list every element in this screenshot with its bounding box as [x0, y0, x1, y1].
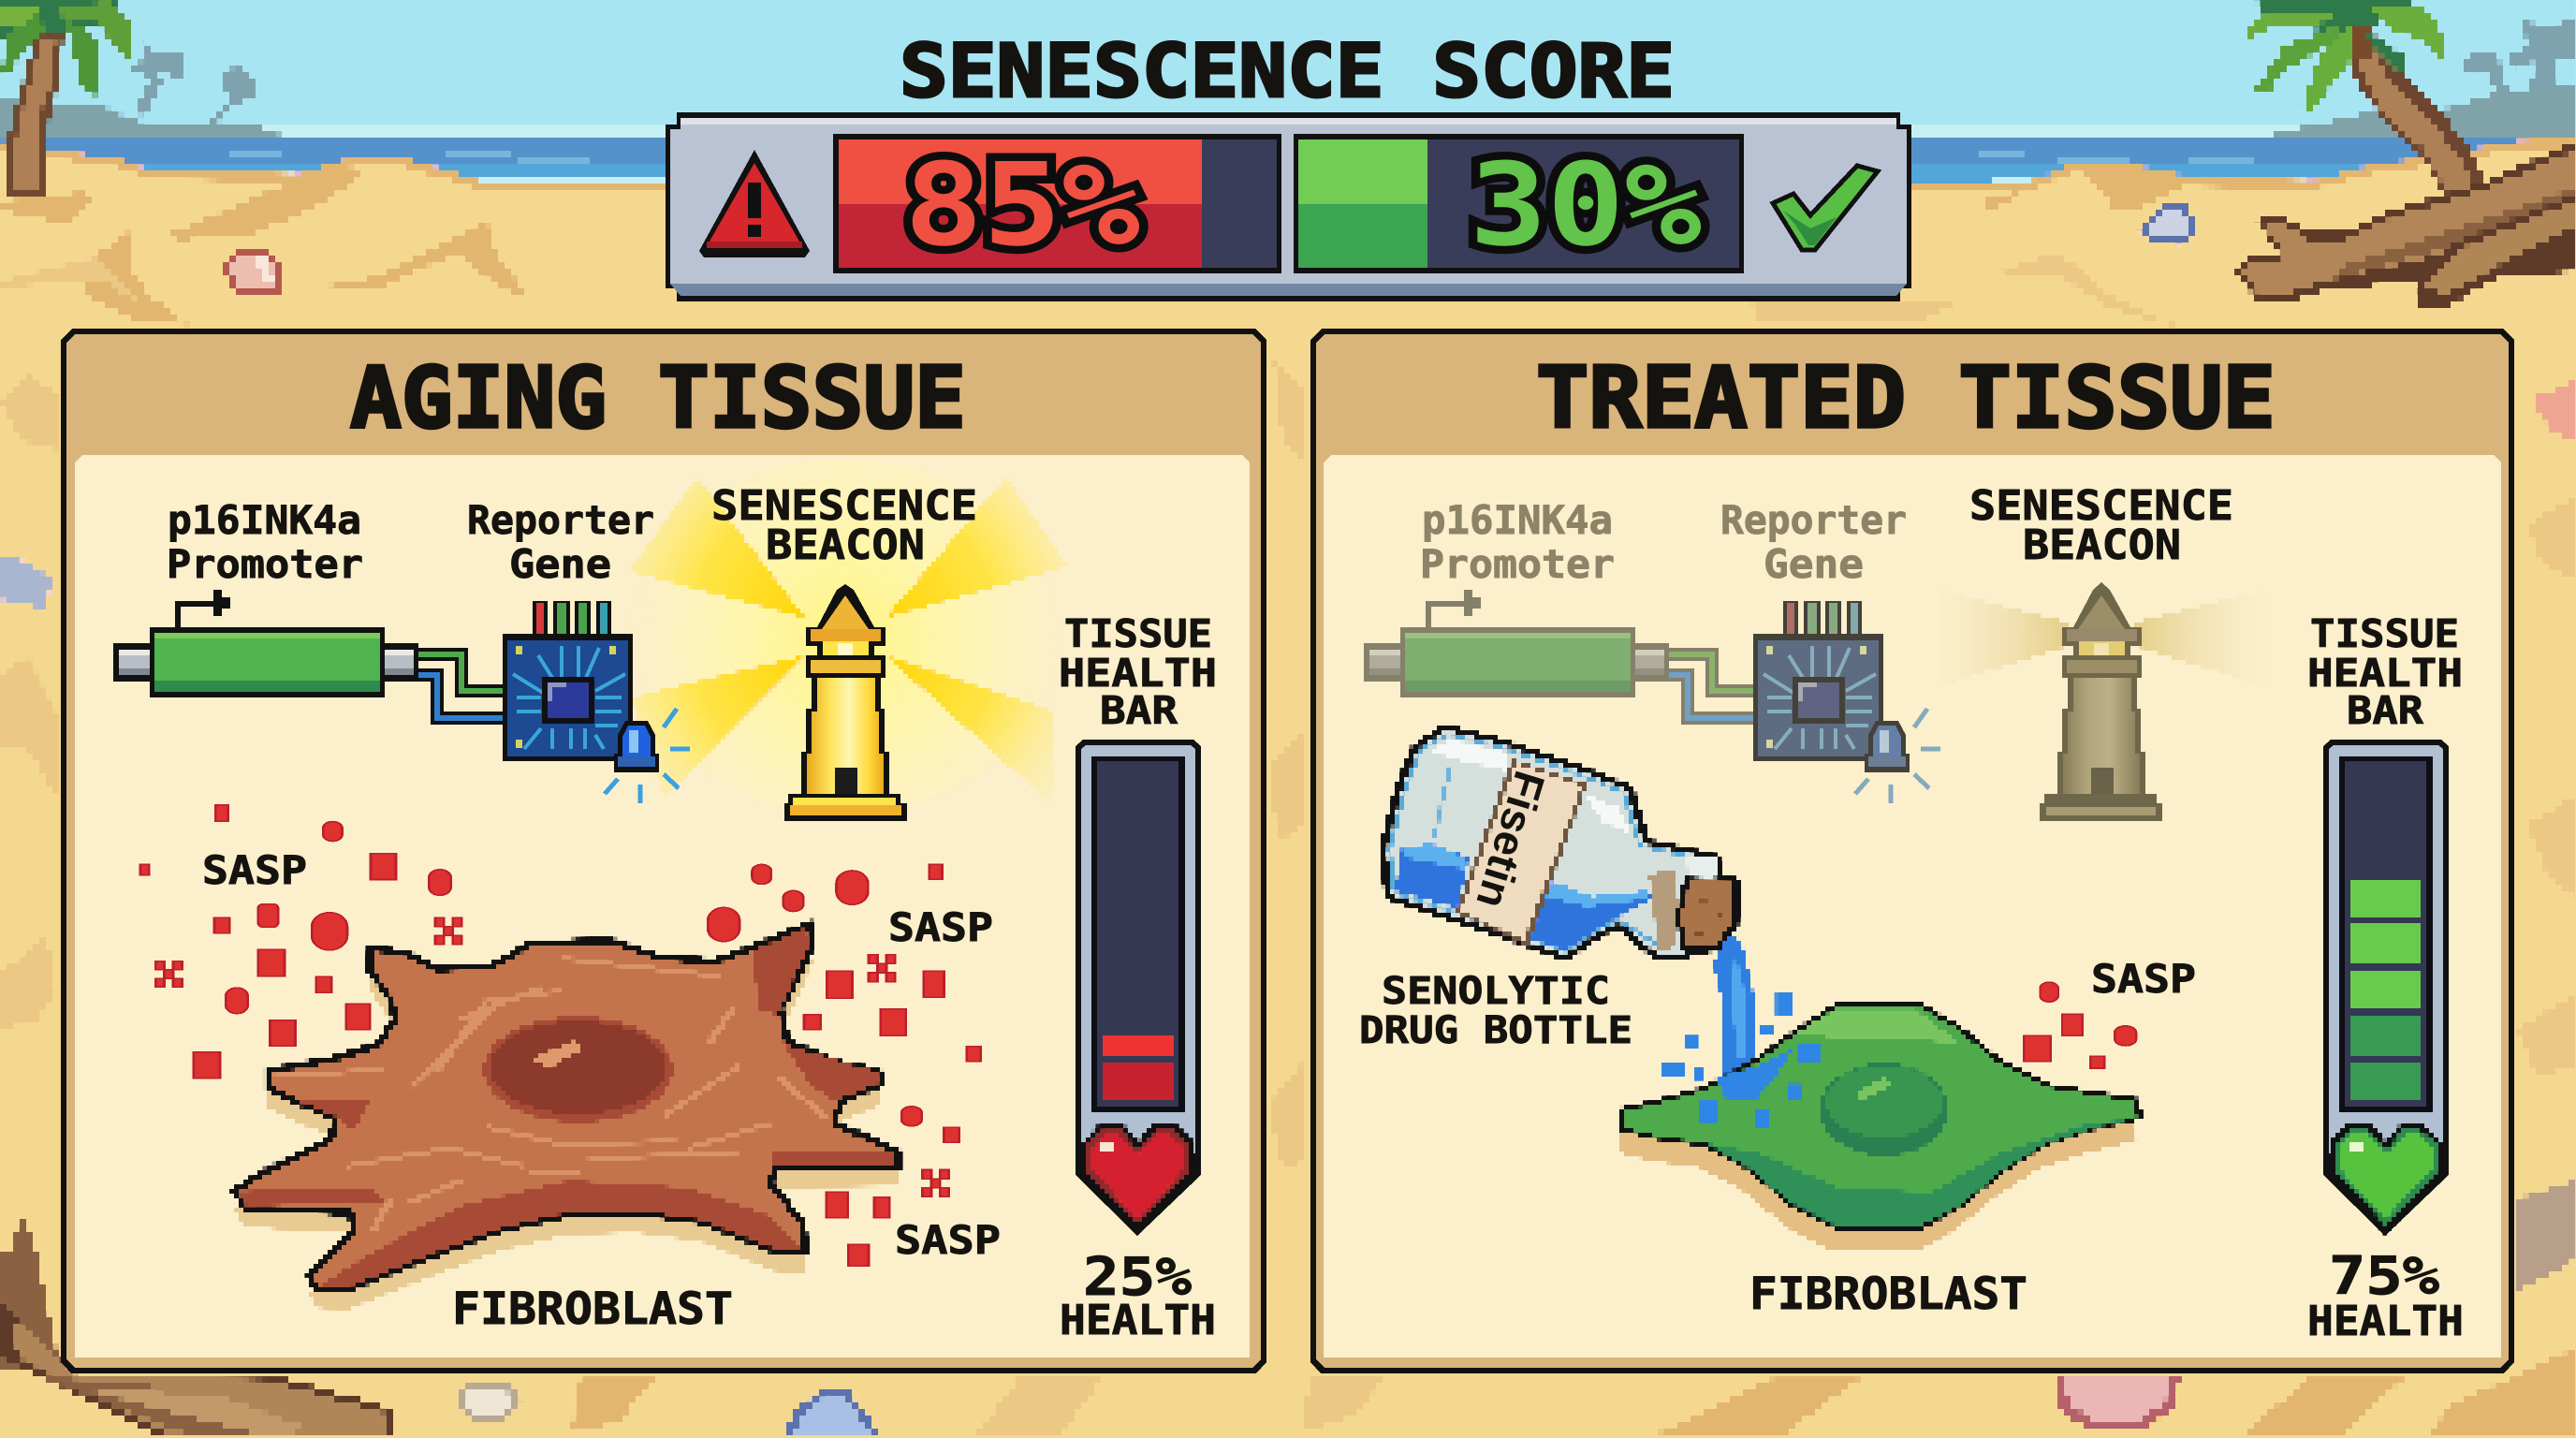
label: senolytic drug bottle: DRUG BOTTLE: [1359, 1009, 1632, 1052]
lighthouse beacon (dimmed): [2040, 582, 2162, 821]
reporter chip (dimmed): [1753, 601, 1940, 803]
drug splash on cell: [1699, 1045, 1819, 1126]
label: SASP 3: SASP: [895, 1217, 1001, 1263]
label: SASP 1: SASP: [202, 847, 307, 893]
panel: aging tissue: [61, 329, 1266, 1373]
warning icon: [699, 150, 810, 257]
SASP particles: [140, 805, 981, 1266]
label: SASP: SASP: [2091, 956, 2196, 1002]
title: senescence score: SENESCENCE SCORE: [900, 30, 1675, 114]
stream of drug: [1713, 932, 1767, 1102]
blue shell bottom: [781, 1388, 884, 1438]
driftwood bottom left: [0, 1214, 394, 1438]
health bar title: HEALTH: [1059, 651, 1217, 696]
label: reporter gene (dimmed): Reporter: [1720, 497, 1907, 543]
red fill segments: [1103, 1035, 1174, 1100]
label: p16INK4a promoter: Promoter: [167, 541, 363, 587]
check icon: [1773, 166, 1878, 250]
green heart: [2329, 1123, 2443, 1234]
pink shell bottom: [2054, 1373, 2181, 1430]
health bar title: HEALTH: [2307, 651, 2463, 696]
tissue health bar: 75%: [2307, 611, 2464, 1345]
health bar title: BAR: [2347, 688, 2423, 733]
heading: TREATED TISSUE: [1536, 349, 2276, 448]
label: senescence beacon: BEACON: [766, 521, 925, 569]
green fill segments: [2350, 880, 2421, 1100]
label: p16INK4a promoter (dimmed): p16INK4a: [1422, 497, 1613, 543]
shell top left: [226, 246, 284, 295]
foreground left palm: [0, 0, 133, 198]
reporter chip with LED: [503, 601, 690, 803]
shell left edge: [0, 555, 52, 609]
health percent: 25%: [1083, 1247, 1192, 1308]
label: fibroblast: FIBROBLAST: [1749, 1269, 2027, 1320]
label: reporter gene (dimmed): Gene: [1764, 541, 1864, 587]
bottle label text: Fisetin: [1467, 766, 1555, 914]
health label: HEALTH: [1060, 1297, 1216, 1344]
promoter cylinder with wires: [113, 590, 503, 718]
red heart: [1081, 1123, 1195, 1234]
lighthouse beacon: [784, 584, 907, 821]
label: p16INK4a promoter: p16INK4a: [168, 497, 361, 543]
splash droplets: [1663, 993, 1819, 1126]
score panel: [666, 112, 1911, 301]
label: senolytic drug bottle: SENOLYTIC: [1382, 970, 1610, 1013]
senolytic drug bottle: [1383, 727, 1819, 1126]
distant palms are drawn in the background: [131, 16, 2576, 126]
beacon light rays: [629, 459, 1067, 814]
green score bar: 30%: 30%: [1470, 139, 1702, 271]
label: SASP 2: SASP: [888, 904, 993, 950]
panel: treated tissue: [1310, 329, 2514, 1373]
label: senescence beacon: SENESCENCE: [1969, 482, 2233, 530]
shell top right: [2136, 204, 2195, 246]
fibroblast: aged cell: [235, 924, 898, 1310]
red score bar: 85%: 85%: [904, 139, 1140, 271]
fibroblast: healthy cell: [1617, 1005, 2141, 1251]
pebble bottom: [455, 1380, 521, 1423]
heading: AGING TISSUE: [350, 349, 966, 448]
label: fibroblast: FIBROBLAST: [452, 1284, 733, 1335]
driftwood top right: [2234, 140, 2576, 309]
promoter cylinder (dimmed): [1364, 590, 1753, 718]
health bar title: TISSUE: [2310, 611, 2459, 656]
shell right edge: [2532, 381, 2576, 440]
label: reporter gene: Gene: [509, 541, 611, 587]
health bar title: TISSUE: [1064, 611, 1212, 656]
dimmed beacon rays: [1938, 590, 2265, 686]
health label: HEALTH: [2307, 1298, 2464, 1345]
SASP particles (few): [2024, 982, 2136, 1068]
label: senescence beacon: BEACON: [2023, 521, 2181, 569]
green score bar: 30%: [1294, 134, 1744, 273]
health bar title: BAR: [1100, 688, 1178, 733]
foreground right palm: [2244, 0, 2490, 211]
red score bar: 85%: [833, 134, 1281, 273]
label: senescence beacon: SENESCENCE: [711, 482, 977, 530]
label: reporter gene: Reporter: [467, 497, 654, 543]
driftwood right edge: [2518, 1180, 2576, 1292]
label: p16INK4a promoter (dimmed): Promoter: [1420, 541, 1615, 587]
tissue health bar: 25%: [1059, 611, 1217, 1344]
health percent: 75%: [2329, 1246, 2439, 1307]
panel frame: [1310, 329, 2514, 1373]
panel frame: [61, 329, 1266, 1373]
